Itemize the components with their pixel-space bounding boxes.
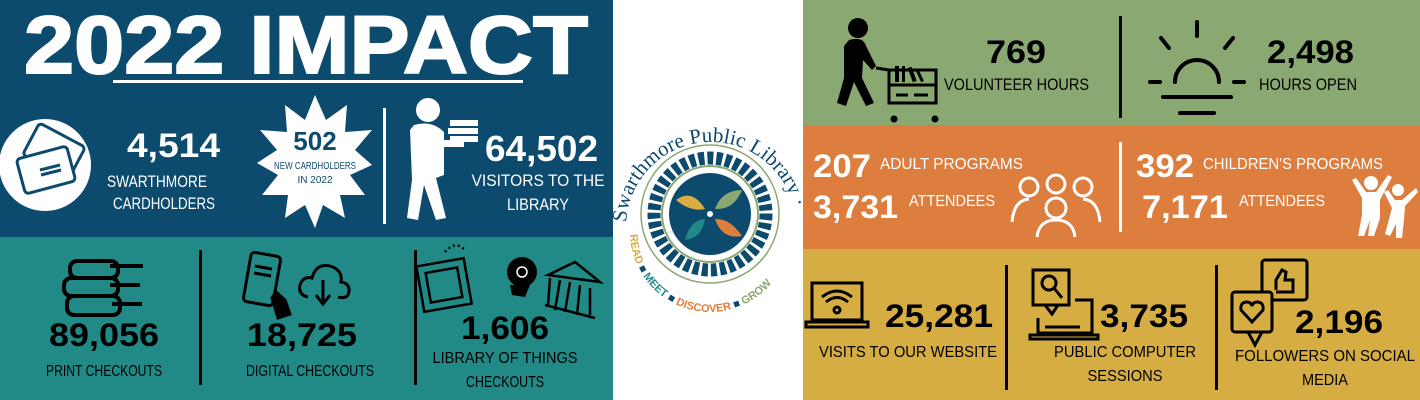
logo: Swarthmore Public Library: Swarthmore Public Library · (613, 127, 801, 221)
stat: children's programs: CHILDREN'S PROGRAMS (1203, 156, 1383, 173)
icon: laptop wifi (806, 283, 868, 327)
stat: volunteer hours: 769 (986, 34, 1046, 70)
stat: hours open (1259, 34, 1357, 94)
stat: cardholders (107, 127, 220, 213)
stat: digital checkouts: DIGITAL CHECKOUTS (246, 363, 374, 380)
stat: visitors (472, 128, 604, 214)
stat: cardholders: SWARTHMORE (107, 172, 207, 191)
stat: library of things (432, 310, 578, 391)
stat: social followers (1235, 304, 1415, 389)
logo: Swarthmore Public Library (613, 127, 801, 312)
stat: print checkouts: 89,056 (49, 317, 159, 353)
stat: cardholders: CARDHOLDERS (113, 194, 215, 213)
stat: social followers: 2,196 (1295, 304, 1383, 340)
logo: Swarthmore Public Library: READ ■ MEET ■ DISCOVER ■ GROW (630, 234, 770, 312)
stat: library of things: CHECKOUTS (466, 374, 544, 391)
starburst: new cardholders: IN 2022 (297, 175, 333, 186)
stat: library of things: LIBRARY OF THINGS (432, 350, 578, 367)
panel: bottom-left teal (0, 237, 613, 400)
stat: cardholders: 4,514 (127, 127, 220, 165)
stat: children's programs: ATTENDEES (1239, 193, 1325, 210)
stat: computer sessions: SESSIONS (1088, 368, 1162, 385)
stat: library of things: 1,606 (461, 310, 549, 346)
stat: adult programs: 3,731 (813, 189, 898, 225)
stat: children's programs: 392 (1136, 148, 1194, 184)
stat: volunteer hours: VOLUNTEER HOURS (944, 75, 1089, 94)
panel: orange (803, 125, 1420, 249)
stat: social followers: MEDIA (1302, 372, 1348, 389)
stat: adult programs: ATTENDEES (909, 193, 995, 210)
stat: adult programs: 207 (813, 148, 871, 184)
stat: digital checkouts: 18,725 (247, 317, 357, 353)
stat: print checkouts: PRINT CHECKOUTS (46, 363, 162, 380)
icon: person carrying books (407, 98, 478, 220)
icon: volunteer with cart (837, 18, 938, 122)
icon: books (64, 261, 143, 315)
starburst: new cardholders (257, 95, 372, 228)
icon: group (1012, 175, 1100, 237)
stat: computer sessions (1054, 298, 1196, 385)
starburst: new cardholders: NEW CARDHOLDERS (274, 161, 356, 172)
stat: visitors: LIBRARY (507, 195, 569, 214)
starburst: new cardholders: 502 (293, 126, 337, 156)
stat: adult programs (813, 148, 1023, 225)
stat: adult programs: ADULT PROGRAMS (880, 156, 1023, 173)
stat: children's programs (1136, 148, 1383, 225)
panel: yellow (803, 249, 1420, 400)
icon: sun (1150, 22, 1244, 113)
stat: website (819, 298, 997, 361)
stat: children's programs: 7,171 (1142, 189, 1228, 225)
stat: computer sessions: 3,735 (1100, 298, 1188, 334)
stat: website: VISITS TO OUR WEBSITE (819, 344, 997, 361)
stat: hours open: 2,498 (1267, 34, 1354, 70)
icons: library of things (416, 245, 600, 318)
panel: top-left blue (0, 0, 613, 237)
stat: print checkouts (46, 317, 162, 380)
icon: social media (1232, 260, 1307, 345)
panel: green (803, 0, 1420, 125)
stat: computer sessions: PUBLIC COMPUTER (1054, 344, 1196, 361)
stat: volunteer hours (944, 34, 1089, 94)
stat: digital checkouts (246, 317, 374, 380)
stat: website: 25,281 (885, 298, 993, 334)
stat: visitors: VISITORS TO THE (472, 171, 604, 190)
stat: visitors: 64,502 (485, 128, 598, 169)
icon: computer search (1030, 270, 1098, 339)
icon: tablet and cloud (243, 252, 349, 318)
icon: cards (0, 119, 91, 211)
title: 2022 IMPACT (24, 0, 588, 91)
icon: kids jumping (1352, 175, 1418, 238)
stat: hours open: HOURS OPEN (1259, 75, 1357, 94)
